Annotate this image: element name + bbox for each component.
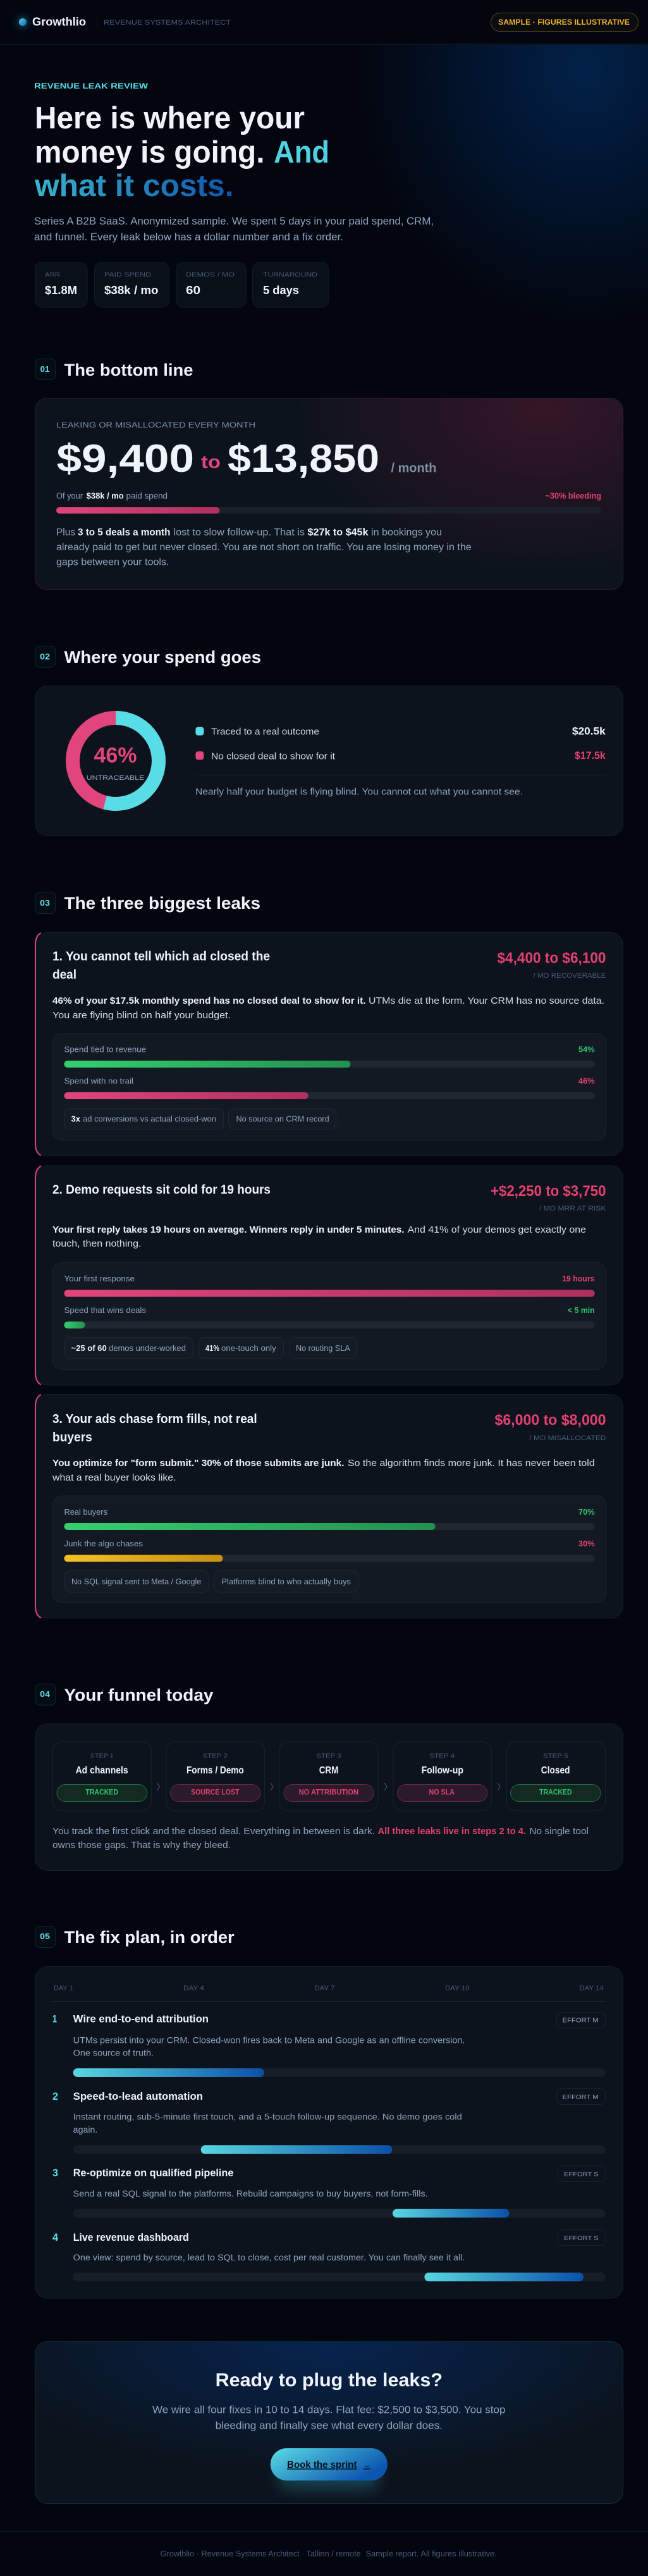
fix 3: 3 — [52, 2167, 58, 2179]
spend note: Nearly half your budget is flying blind. You cannot cut what you cannot see. — [195, 787, 523, 797]
timeline axis: DAY 4 — [183, 1985, 204, 1992]
bar: spend tied to revenue: 54% — [578, 1045, 595, 1054]
hero title: what it costs. — [34, 169, 234, 203]
chip: no routing SLA — [290, 1337, 357, 1359]
spend bar caption: paid spend — [126, 491, 168, 501]
funnel note: You track the first click and the closed deal. Everything in between is dark. — [52, 1826, 375, 1837]
donut chart: 46% — [94, 744, 137, 768]
legend: traced — [195, 726, 606, 737]
leak 1 title: deal — [52, 968, 76, 982]
funnel step 4: Follow-up — [422, 1765, 463, 1776]
fix 4: 4 — [52, 2231, 59, 2243]
arrow — [271, 1783, 273, 1790]
chip: no SQL signal: No SQL signal sent to Meta / Google — [71, 1577, 201, 1586]
leak 2 amount: +$2,250 to $3,750 — [491, 1183, 606, 1200]
funnel step 1: TRACKED — [85, 1789, 118, 1797]
stat: turnaround — [253, 262, 329, 307]
footer — [0, 2531, 648, 2558]
leak 3 amount: / MO MISALLOCATED — [529, 1434, 606, 1442]
leak 2 amount: / MO MRR AT RISK — [539, 1205, 606, 1212]
stat: turnaround: 5 days — [263, 284, 299, 297]
funnel step 4 — [393, 1742, 491, 1811]
bar: junk: 30% — [578, 1539, 595, 1548]
leak 2 text: touch, then nothing. — [52, 1238, 142, 1249]
funnel step 5: Closed — [541, 1765, 570, 1776]
bar: winning speed: Speed that wins deals — [64, 1305, 147, 1315]
leak 3 text: You optimize for "form submit." 30% of those submits are junk. — [52, 1458, 344, 1469]
leak 2 amount — [491, 1183, 606, 1212]
logo dot — [18, 17, 28, 27]
sample badge — [491, 13, 639, 32]
leak 1 text — [52, 995, 604, 1021]
leak 3 amount — [494, 1412, 606, 1442]
header bar — [0, 0, 648, 45]
chip: platforms blind — [214, 1571, 358, 1593]
leak 1 amount — [497, 950, 606, 980]
section heading 01: 01 — [40, 364, 49, 374]
leak 1 evidence panel — [52, 1033, 606, 1140]
spend bar — [56, 507, 601, 514]
leak 2 title: 2. Demo requests sit cold for 19 hours — [52, 1183, 271, 1197]
leak 1 text: You are flying blind on half your budget. — [52, 1010, 231, 1021]
leak amount: $9,400 — [57, 437, 194, 481]
leak 1 amount: / MO RECOVERABLE — [534, 972, 606, 980]
funnel step 3: STEP 3 — [316, 1752, 341, 1759]
stat: ARR: ARR — [45, 271, 60, 278]
panel: leak 1 — [35, 932, 623, 1156]
hero eyebrow: REVENUE LEAK REVIEW — [34, 82, 149, 90]
leak 2 text: Your first reply takes 19 hours on average. Winners reply in under 5 minutes. — [52, 1224, 405, 1235]
hero subtitle: Series A B2B SaaS. Anonymized sample. We spent 5 days in your paid spend, CRM, — [34, 216, 434, 227]
bar: real buyers — [64, 1507, 595, 1530]
CTA button: Book the sprint — [287, 2460, 357, 2470]
leak 1 text: UTMs die at the form. Your CRM has no source data. — [369, 995, 604, 1006]
funnel step 4: NO SLA — [429, 1789, 455, 1797]
stat: paid spend — [95, 262, 169, 307]
timeline axis: DAY 7 — [315, 1985, 335, 1992]
funnel note — [52, 1826, 589, 1851]
stat: paid spend: $38k / mo — [104, 284, 159, 297]
funnel step 3: NO ATTRIBUTION — [299, 1789, 358, 1797]
chip: ad conversions: 3x — [71, 1114, 80, 1123]
bottom line text — [56, 527, 472, 568]
leak 3 text: what a real buyer looks like. — [52, 1472, 176, 1483]
chip: one-touch: one-touch only — [221, 1344, 276, 1353]
hero title: Here is where your — [35, 101, 305, 135]
fix 1: One source of truth. — [73, 2047, 154, 2057]
bottom line text: gaps between your tools. — [56, 557, 169, 568]
panel: leak 2 — [35, 1166, 623, 1385]
CTA text: bleeding and finally see what every dollar does. — [216, 2420, 443, 2431]
funnel step 2: Forms / Demo — [186, 1765, 244, 1776]
section heading 05: 05 — [40, 1932, 50, 1941]
legend: traced: $20.5k — [572, 726, 606, 737]
bar: spend with no trail: 46% — [578, 1076, 595, 1085]
arrow — [498, 1783, 500, 1790]
bar: spend tied to revenue: Spend tied to revenue — [64, 1045, 146, 1054]
leak 3 text: So the algorithm finds more junk. It has never been told — [348, 1458, 595, 1469]
donut chart — [73, 718, 159, 804]
fix 4: Live revenue dashboard — [73, 2232, 189, 2243]
CTA heading: Ready to plug the leaks? — [216, 2370, 443, 2391]
funnel step 2: STEP 2 — [202, 1752, 228, 1759]
leak amount — [57, 437, 436, 481]
leak amount: $13,850 — [228, 437, 379, 481]
leak 3 text — [52, 1458, 595, 1483]
chip: no SQL signal — [64, 1571, 209, 1593]
section heading 01: The bottom line — [64, 361, 193, 379]
fix 2: Speed-to-lead automation — [73, 2091, 203, 2102]
panel: funnel — [35, 1724, 623, 1871]
bottom line text: already paid to get but never closed. You are not short on traffic. You are losing money in the — [56, 542, 472, 553]
legend: no closed deal: $17.5k — [575, 750, 606, 761]
spend bar caption: ~30% bleeding — [545, 491, 601, 501]
funnel step 4: STEP 4 — [430, 1752, 455, 1759]
funnel step 1: STEP 1 — [90, 1752, 114, 1759]
chip: one-touch — [199, 1337, 283, 1359]
timeline axis: DAY 10 — [445, 1985, 470, 1992]
fix 3 — [52, 2166, 606, 2217]
hero subtitle — [34, 216, 434, 243]
funnel note: owns those gaps. That is why they bleed. — [52, 1840, 231, 1851]
stat: ARR — [35, 262, 87, 307]
arrow — [157, 1783, 159, 1790]
bar: real buyers: 70% — [578, 1507, 595, 1517]
leak 2 text — [52, 1224, 586, 1249]
stat: demos — [176, 262, 246, 307]
funnel step 5 — [507, 1742, 606, 1811]
panel: leak 3 — [35, 1394, 623, 1618]
funnel step 5: STEP 5 — [543, 1752, 568, 1759]
section heading 02: Where your spend goes — [64, 648, 261, 667]
leak 2 evidence panel — [52, 1262, 606, 1370]
leak 2 text: And 41% of your demos get exactly one — [407, 1224, 586, 1235]
timeline axis — [52, 1985, 606, 2002]
section heading 05: The fix plan, in order — [64, 1928, 235, 1947]
section heading 02: 02 — [40, 651, 50, 662]
brand name: Growthlio — [32, 15, 86, 28]
chip: demos under-worked — [64, 1337, 193, 1359]
legend: traced: Traced to a real outcome — [211, 726, 319, 737]
bar: winning speed — [64, 1305, 595, 1328]
leak 1 title — [52, 950, 270, 982]
fix 3: Re-optimize on qualified pipeline — [73, 2167, 233, 2179]
bar: junk — [64, 1539, 595, 1562]
fix 1: Wire end-to-end attribution — [73, 2014, 209, 2025]
CTA button — [271, 2448, 388, 2489]
chip: no source — [229, 1109, 336, 1130]
hero background glow — [0, 44, 648, 329]
bar: first response: Your first response — [64, 1274, 135, 1283]
leak 3 title: 3. Your ads chase form fills, not real — [52, 1412, 257, 1426]
sample badge: SAMPLE · FIGURES ILLUSTRATIVE — [498, 19, 630, 27]
funnel step 2: SOURCE LOST — [191, 1789, 239, 1797]
bottom line text: 3 to 5 deals a month — [78, 527, 170, 538]
footer: Sample report. All figures illustrative. — [365, 2549, 497, 2558]
panel: bottom line — [35, 398, 623, 589]
leak 3 title — [52, 1412, 257, 1445]
funnel step 1 — [53, 1742, 151, 1811]
bottom line text: $27k to $45k — [307, 527, 369, 538]
bar: first response — [64, 1274, 595, 1297]
leak 1 amount: $4,400 to $6,100 — [497, 950, 606, 966]
chip: one-touch: 41% — [205, 1344, 219, 1353]
hero title: And — [274, 135, 329, 169]
fix 3: EFFORT S — [564, 2171, 599, 2178]
spend bar caption: Of your — [56, 491, 83, 501]
fix 1: 1 — [52, 2012, 57, 2025]
leak 1 title: 1. You cannot tell which ad closed the — [52, 950, 270, 964]
bottom line label: LEAKING OR MISALLOCATED EVERY MONTH — [56, 421, 255, 429]
funnel note: No single tool — [529, 1826, 589, 1837]
leak 3 amount: $6,000 to $8,000 — [494, 1412, 606, 1429]
timeline axis: DAY 14 — [579, 1985, 603, 1992]
stat: demos: DEMOS / MO — [186, 271, 235, 278]
bar: spend tied to revenue — [64, 1045, 595, 1068]
footer: Growthlio · Revenue Systems Architect · Tallinn / remote — [161, 2549, 361, 2558]
leak 3 evidence panel — [52, 1496, 606, 1603]
bar: winning speed: < 5 min — [568, 1305, 595, 1315]
arrow — [384, 1783, 387, 1790]
section heading 03: The three biggest leaks — [64, 894, 260, 913]
legend: no closed deal — [195, 750, 606, 761]
chip: no source: No source on CRM record — [236, 1114, 329, 1123]
fix 2: 2 — [52, 2090, 58, 2102]
fix 4: EFFORT S — [564, 2234, 599, 2242]
panel: spend split — [35, 686, 623, 836]
CTA text: We wire all four fixes in 10 to 14 days. Flat fee: $2,500 to $3,500. You stop — [152, 2405, 505, 2416]
stat: demos: 60 — [186, 284, 200, 297]
stat: ARR: $1.8M — [45, 284, 77, 297]
bar: junk: Junk the algo chases — [64, 1539, 144, 1548]
bottom line text: lost to slow follow-up. That is — [173, 527, 305, 538]
chip: demos under-worked: ~25 of 60 — [71, 1344, 107, 1353]
CTA text — [152, 2405, 505, 2431]
section heading 03: 03 — [40, 898, 50, 908]
bar: first response: 19 hours — [562, 1274, 595, 1283]
leak amount: / month — [391, 462, 436, 476]
chip: platforms blind: Platforms blind to who actually buys — [221, 1577, 351, 1586]
panel: call to action — [35, 2341, 623, 2503]
funnel note: All three leaks live in steps 2 to 4. — [378, 1826, 526, 1837]
bottom line text: in bookings you — [371, 527, 442, 538]
funnel step 1: Ad channels — [76, 1765, 128, 1776]
leak 3 title: buyers — [52, 1431, 92, 1445]
funnel step 3 — [279, 1742, 378, 1811]
funnel step 2 — [166, 1742, 264, 1811]
section heading 04: Your funnel today — [64, 1685, 214, 1704]
leak 1 text: 46% of your $17.5k monthly spend has no closed deal to show for it. — [52, 995, 365, 1006]
fix 4: One view: spend by source, lead to SQL to close, cost per real customer. You can finally see it all. — [73, 2252, 465, 2262]
stat: turnaround: TURNAROUND — [263, 271, 317, 278]
hero title — [34, 101, 329, 203]
chip: no routing SLA: No routing SLA — [296, 1344, 350, 1353]
stat: paid spend: PAID SPEND — [104, 271, 151, 278]
bar: spend with no trail: Spend with no trail — [64, 1076, 133, 1085]
legend: no closed deal: No closed deal to show for it — [211, 751, 336, 761]
bar: spend with no trail — [64, 1076, 595, 1099]
spend bar caption — [56, 491, 601, 501]
timeline axis: DAY 1 — [54, 1985, 73, 1992]
funnel step 3: CRM — [319, 1765, 338, 1776]
chip: ad conversions: ad conversions vs actual closed-won — [83, 1114, 216, 1123]
funnel step 5: TRACKED — [539, 1789, 572, 1797]
panel: fix plan — [35, 1967, 623, 2298]
fix 2: Instant routing, sub-5-minute first touch, and a 5-touch follow-up sequence. No demo goes cold — [73, 2111, 462, 2121]
fix 4 — [52, 2230, 606, 2281]
bar: real buyers: Real buyers — [64, 1507, 107, 1517]
fix 1 — [52, 2012, 606, 2077]
section heading 04: 04 — [40, 1689, 51, 1699]
CTA button: → — [364, 2460, 370, 2470]
hero subtitle: and funnel. Every leak below has a dollar number and a fix order. — [34, 231, 343, 243]
fix 3: Send a real SQL signal to the platforms. Rebuild campaigns to buy buyers, not form-fills. — [73, 2188, 428, 2198]
fix 2: EFFORT M — [563, 2093, 599, 2101]
brand role: REVENUE SYSTEMS ARCHITECT — [104, 19, 231, 27]
fix 1: UTMs persist into your CRM. Closed-won fires back to Meta and Google as an offline conversion. — [73, 2035, 465, 2045]
fix 1: EFFORT M — [563, 2017, 599, 2024]
chip: demos under-worked: demos under-worked — [109, 1344, 186, 1353]
spend bar caption: $38k / mo — [87, 491, 124, 501]
hero title: money is going. — [35, 135, 264, 169]
chip: ad conversions — [64, 1109, 224, 1130]
leak amount: to — [201, 452, 221, 472]
bottom line text: Plus — [56, 527, 75, 538]
fix 2 — [52, 2088, 606, 2154]
donut chart: UNTRACEABLE — [87, 774, 144, 782]
fix 2: again. — [73, 2124, 97, 2135]
